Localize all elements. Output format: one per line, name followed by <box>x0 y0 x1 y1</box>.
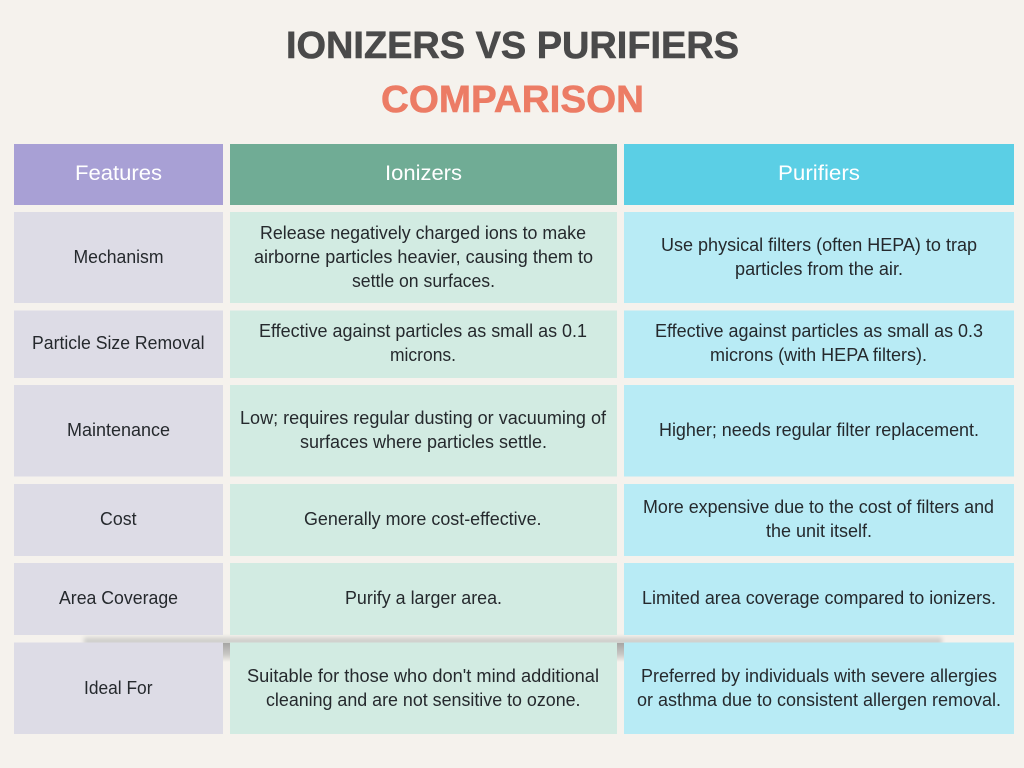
row: Mechanism <box>14 212 1014 303</box>
ionizers: Mechanism: settle on surfaces. <box>352 271 495 291</box>
purifiers: Particle Size Removal: microns (with HEPA filters). <box>710 345 927 365</box>
row: Cost <box>14 484 1014 556</box>
title: COMPARISON <box>381 79 644 121</box>
header: Features: Features <box>75 162 162 185</box>
feature: Ideal For: Ideal For <box>84 678 152 698</box>
purifiers: Ideal For: Preferred by individuals with severe allergies <box>641 666 997 686</box>
feature: Mechanism: Mechanism <box>74 247 164 267</box>
ionizers: Ideal For <box>230 642 617 734</box>
ionizers: Ideal For: cleaning and are not sensitive to ozone. <box>266 690 580 710</box>
ionizers: Particle Size Removal <box>230 310 617 378</box>
ionizers: Maintenance <box>230 385 617 476</box>
purifiers: Cost: the unit itself. <box>766 521 872 541</box>
purifiers: Maintenance <box>624 385 1014 476</box>
ionizers: Mechanism: airborne particles heavier, causing them to <box>254 247 593 267</box>
ionizers: Area Coverage <box>230 563 617 635</box>
feature: Cost <box>14 484 223 556</box>
purifiers: Ideal For <box>624 642 1014 734</box>
ionizers: Mechanism <box>230 212 617 303</box>
ionizers: Particle Size Removal: microns. <box>390 345 456 365</box>
ionizers: Maintenance: surfaces where particles settle. <box>300 432 547 452</box>
title <box>286 25 739 121</box>
ionizers: Maintenance: Low; requires regular dusting or vacuuming of <box>240 408 607 428</box>
header: Features <box>14 144 223 205</box>
ionizers: Mechanism: Release negatively charged ions to make <box>260 223 586 243</box>
purifiers: Ideal For: or asthma due to consistent allergen removal. <box>637 690 1001 710</box>
purifiers: Mechanism: particles from the air. <box>735 259 903 279</box>
header: Purifiers <box>624 144 1014 205</box>
row: Area Coverage <box>14 563 1014 635</box>
ionizers: Area Coverage: Purify a larger area. <box>345 588 502 608</box>
row: Maintenance <box>14 385 1014 476</box>
purifiers: Particle Size Removal: Effective against particles as small as 0.3 <box>655 321 983 341</box>
purifiers: Cost: More expensive due to the cost of filters and <box>643 497 994 517</box>
feature: Maintenance: Maintenance <box>67 420 170 440</box>
row: Ideal For <box>14 642 1014 734</box>
purifiers: Mechanism <box>624 212 1014 303</box>
purifiers: Cost <box>624 484 1014 556</box>
header: Ionizers: Ionizers <box>385 162 462 185</box>
purifiers: Maintenance: Higher; needs regular filter replacement. <box>659 420 979 440</box>
ionizers: Ideal For: Suitable for those who don't mind additional <box>247 666 599 686</box>
feature: Area Coverage <box>14 563 223 635</box>
purifiers: Area Coverage: Limited area coverage compared to ionizers. <box>642 588 996 608</box>
header: Ionizers <box>230 144 617 205</box>
purifiers: Area Coverage <box>624 563 1014 635</box>
feature: Area Coverage: Area Coverage <box>59 588 178 608</box>
feature: Ideal For <box>14 642 223 734</box>
feature: Maintenance <box>14 385 223 476</box>
header: Purifiers: Purifiers <box>778 162 860 185</box>
row: Particle Size Removal <box>14 310 1014 378</box>
feature: Particle Size Removal <box>14 310 223 378</box>
purifiers: Particle Size Removal <box>624 310 1014 378</box>
title: IONIZERS VS PURIFIERS <box>286 25 739 67</box>
ionizers: Particle Size Removal: Effective against particles as small as 0.1 <box>259 321 587 341</box>
feature: Mechanism <box>14 212 223 303</box>
feature: Particle Size Removal: Particle Size Removal <box>32 333 204 353</box>
ionizers: Cost <box>230 484 617 556</box>
purifiers: Mechanism: Use physical filters (often HEPA) to trap <box>661 235 977 255</box>
ionizers: Cost: Generally more cost-effective. <box>304 509 542 529</box>
feature: Cost: Cost <box>100 509 136 529</box>
